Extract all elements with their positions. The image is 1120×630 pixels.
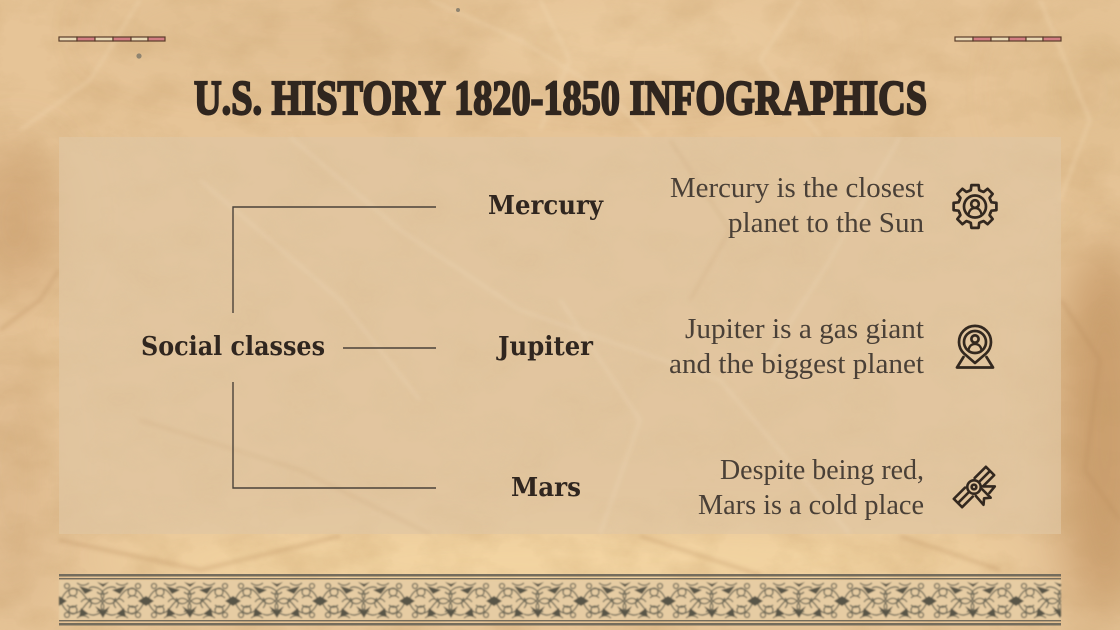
decorative ornamental footer band bbox=[59, 574, 1061, 626]
description: Mercury bbox=[670, 173, 924, 239]
description: Jupiter bbox=[669, 314, 924, 380]
label: Jupiter: Jupiter bbox=[496, 332, 593, 362]
root label: Social classes: Social classes bbox=[141, 332, 325, 362]
description: Mars: Mars is a cold place bbox=[698, 490, 924, 521]
title: U.S. HISTORY 1820-1850 INFOGRAPHICS bbox=[194, 70, 927, 125]
description: Jupiter: Jupiter is a gas giant bbox=[685, 314, 924, 345]
icon: diploma scroll bbox=[953, 466, 1004, 517]
decoration: top right striped bar bbox=[955, 37, 1061, 41]
label: Mercury: Mercury bbox=[488, 191, 604, 221]
description: Mars: Despite being red, bbox=[720, 455, 924, 486]
description: Mercury: Mercury is the closest bbox=[670, 173, 924, 204]
description: Mars bbox=[698, 455, 924, 521]
label: Mars: Mars bbox=[511, 473, 581, 503]
row: Jupiter bbox=[496, 314, 993, 380]
icon: gear with person bbox=[954, 185, 996, 228]
icon: map pin with person bbox=[957, 326, 993, 368]
decoration: top left striped bar bbox=[59, 37, 165, 41]
description: Jupiter: and the biggest planet bbox=[669, 349, 924, 380]
row: Mercury bbox=[488, 173, 996, 239]
description: Mercury: planet to the Sun bbox=[728, 208, 924, 239]
row: Mars bbox=[511, 455, 1004, 521]
tree connector lines bbox=[233, 207, 436, 488]
panel: translucent content area bbox=[59, 137, 1061, 534]
